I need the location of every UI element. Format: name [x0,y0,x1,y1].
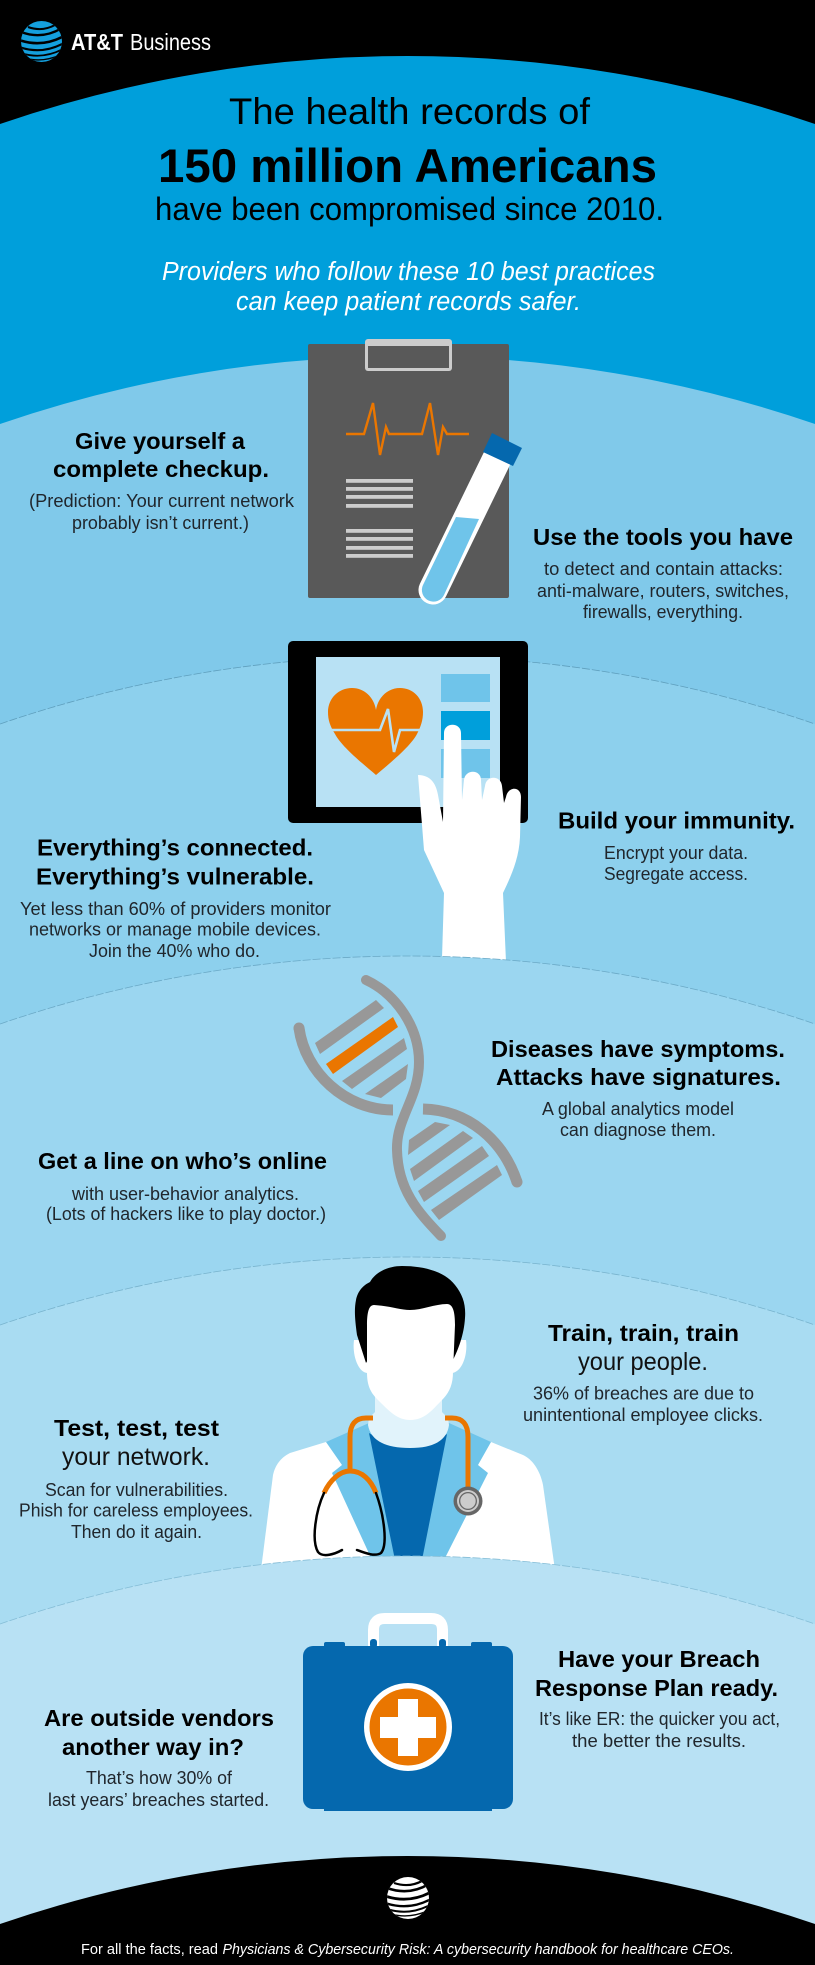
coat [261,1442,555,1570]
logo: AT&T Business: Business [130,29,211,55]
heading: Response Plan ready. [535,1675,778,1701]
text block: last years’ breaches started. [48,1790,269,1810]
text block: A global analytics model [542,1099,734,1119]
heading: Everything’s connected. [37,834,313,860]
heading: Test, test, test [54,1415,219,1441]
text block: Segregate access. [604,864,748,884]
panel: build your immunity [558,808,795,884]
title: The health records of [229,91,591,132]
heading: Use the tools you have [533,524,793,550]
hair [355,1266,465,1363]
section: blue header arc [0,56,815,500]
text block: networks or manage mobile devices. [29,920,321,940]
text block: Then do it again. [71,1522,202,1542]
heading [36,834,314,890]
subtitle: can keep patient records safer. [236,288,581,316]
text block: with user-behavior analytics. [71,1184,299,1204]
heading [54,1415,219,1471]
subtitle [162,258,655,316]
heading [53,428,269,482]
title [155,91,664,227]
text block: unintentional employee clicks. [523,1405,763,1425]
panel: breach response plan [535,1646,780,1751]
panel: are outside vendors [44,1705,274,1810]
text block [46,1184,326,1224]
face [367,1304,455,1420]
text block: Scan for vulnerabilities. [45,1480,228,1500]
section: band 5 [0,1556,815,1965]
section: band 1 [0,356,815,800]
section: band 3 [0,956,815,1400]
lapels [326,1423,491,1560]
text block [48,1768,269,1810]
stethoscope [315,1418,468,1555]
title: have been compromised since 2010. [155,191,664,227]
panel: complete checkup [29,428,295,533]
icon: clipboard with test tube [308,339,522,602]
heading: Give yourself a [75,428,245,454]
heading: another way in? [62,1734,244,1760]
icon: AT&T globe [19,21,64,62]
panel: use the tools [533,524,793,622]
icon: DNA helix [294,980,522,1236]
panel: diseases have symptoms [491,1036,785,1140]
text block: (Prediction: Your current network [29,491,295,511]
icon: footer globe [385,1877,431,1919]
text block: That’s how 30% of [86,1768,233,1788]
heading: complete checkup. [53,456,269,482]
title: 150 million Americans [158,139,657,192]
footer text: Physicians & Cybersecurity Risk: A cybersecurity handbook for healthcare CEOs. [222,1942,734,1958]
panel: test your network [19,1415,253,1542]
text block: Join the 40% who do. [89,941,260,961]
heading: Build your immunity. [558,808,795,834]
text block: Yet less than 60% of providers monitor [20,899,331,919]
section: band 2 [0,656,815,1100]
background: black top band [0,0,815,200]
text block: It’s like ER: the quicker you act, [539,1709,780,1729]
text block [20,899,331,961]
shirt [369,1433,447,1560]
text block: the better the results. [572,1731,746,1751]
text block: Phish for careless employees. [19,1500,253,1520]
icon: doctor with stethoscope [261,1266,555,1570]
heading [548,1320,739,1376]
text block: Encrypt your data. [604,843,748,863]
heading [535,1646,778,1701]
text block: probably isn’t current.) [72,513,249,533]
text block: firewalls, everything. [583,602,743,622]
section: band 4 [0,1257,815,1700]
panel: get a line on who's online [38,1148,327,1224]
footer text: For all the facts, read [81,1942,218,1958]
subtitle: Providers who follow these 10 best practices [162,258,655,286]
text block: 36% of breaches are due to [533,1384,754,1404]
heading [44,1705,274,1760]
icon: first aid kit [303,1618,513,1811]
panel: everything's connected [20,834,331,961]
logo: AT&T Business [19,21,211,62]
heading: Train, train, train [548,1320,739,1346]
ears [354,1340,466,1373]
heading: your network. [62,1443,210,1471]
text block [542,1099,734,1140]
heading [491,1036,785,1090]
heading: Are outside vendors [44,1705,274,1731]
footer: black arc [0,1856,815,1965]
heading: Attacks have signatures. [496,1064,781,1090]
heading: your people. [578,1348,708,1376]
text block [604,843,748,884]
icon: tablet with heart and hand [288,641,528,962]
text block: anti-malware, routers, switches, [537,581,789,601]
text block [19,1480,253,1542]
heading: Diseases have symptoms. [491,1036,785,1062]
panel: train your people [523,1320,763,1425]
logo: AT&T Business: AT&T [71,29,123,55]
heading: Everything’s vulnerable. [36,864,314,890]
text block [537,559,789,622]
text block [29,491,295,533]
heading: Get a line on who’s online [38,1148,327,1174]
text block [539,1709,780,1751]
text block: can diagnose them. [560,1120,716,1140]
heading: Have your Breach [558,1646,760,1672]
text block [523,1384,763,1425]
text block: (Lots of hackers like to play doctor.) [46,1204,326,1224]
text block: to detect and contain attacks: [544,559,783,579]
neck [368,1395,449,1448]
